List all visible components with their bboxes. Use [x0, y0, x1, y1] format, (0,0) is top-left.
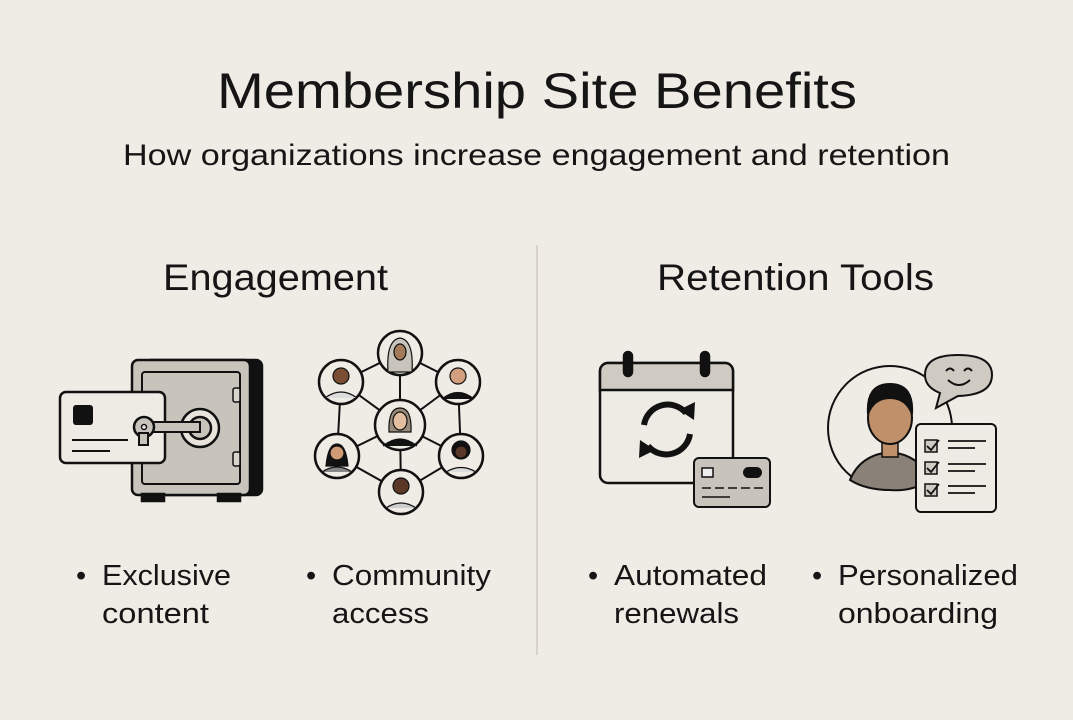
bullet: personalized onboarding: Personalized: [838, 560, 1018, 592]
bullet: community access: [306, 560, 492, 630]
bullet: exclusive content: [76, 560, 231, 630]
heading: retention tools: Retention Tools: [657, 257, 934, 298]
bullet: personalized onboarding: onboarding: [838, 598, 998, 630]
title: Membership Site Benefits: [217, 63, 857, 119]
heading: engagement: Engagement: [163, 257, 389, 298]
icon: community network: [315, 331, 483, 514]
bullet: exclusive content: Exclusive: [102, 560, 231, 592]
bullet: automated renewals: [588, 560, 767, 630]
bullet: exclusive content: •: [76, 560, 86, 592]
icon: personalized onboarding: [828, 355, 996, 512]
icon: calendar with renewal: [600, 352, 770, 507]
bullet: personalized onboarding: [812, 560, 1018, 630]
bullet: community access: •: [306, 560, 316, 592]
bullet: automated renewals: Automated: [614, 560, 767, 592]
bullet: personalized onboarding: •: [812, 560, 822, 592]
bullet: automated renewals: renewals: [614, 598, 739, 630]
bullet: community access: access: [332, 598, 429, 630]
icon: safe with card key: [60, 360, 262, 501]
bullet: community access: Community: [332, 560, 492, 592]
subtitle: How organizations increase engagement and retention: [123, 139, 950, 172]
bullet: automated renewals: •: [588, 560, 598, 592]
bullet: exclusive content: content: [102, 598, 209, 630]
